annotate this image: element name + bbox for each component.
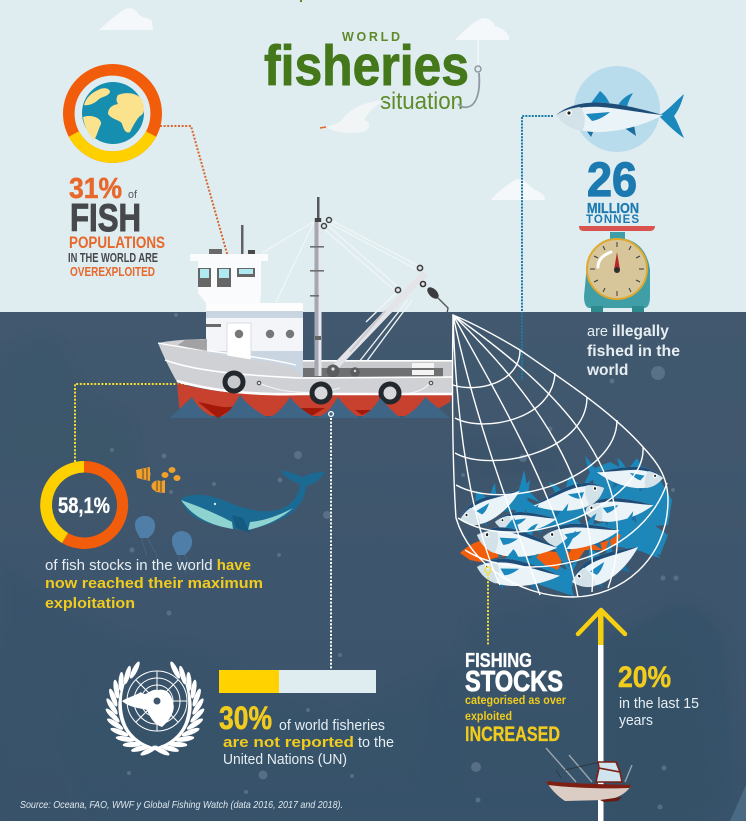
cloud top left: [99, 8, 153, 30]
icon: UN emblem: [104, 660, 206, 757]
dotted line: orange: [160, 126, 231, 262]
text: are illegally fished: world: [586, 362, 628, 379]
text: 58,1% description: now reached their maximum: [45, 575, 263, 592]
blue fin masses: [500, 462, 672, 595]
stat: 31% of fish populations: POPULATIONS: [69, 233, 165, 252]
hull: [177, 383, 452, 416]
icon: small orange fish: [136, 467, 180, 493]
text: 20%: in the last 15: [619, 696, 699, 712]
donut: 58,1%: [40, 461, 128, 549]
wreath: [104, 660, 206, 757]
net lines: [452, 315, 668, 597]
text: 20%: [618, 661, 699, 729]
title: situation: [380, 88, 463, 115]
text: 20%: years: [619, 713, 653, 729]
text: fishing stocks increased: INCREASED: [465, 723, 560, 746]
text: are illegally fished: [586, 323, 680, 379]
icon: globe donut: [69, 70, 156, 163]
title: fisheries: [264, 34, 469, 98]
arrow: upward increase: [578, 610, 625, 821]
text: 30% not reported: 30%: [219, 700, 272, 736]
bubbles: [110, 313, 678, 810]
text: 58,1% description: of fish stocks in the world have: [45, 557, 251, 574]
sea background: [0, 312, 746, 821]
dotted line: yellow to stocks: [485, 567, 491, 645]
text: 30% not reported: [219, 700, 394, 768]
illustration: net with fish: [452, 315, 672, 600]
waves: [170, 395, 450, 418]
tunas: [582, 485, 669, 528]
tyres: [225, 373, 243, 391]
boom: [336, 273, 425, 366]
text: 30% not reported: to the: [358, 734, 394, 751]
text: 20%: 20%: [618, 661, 671, 694]
text: 58,1% description: exploitation: [45, 595, 135, 612]
lighter seabed corner: [730, 785, 746, 821]
cabin: [206, 303, 303, 377]
icon: seagull: [320, 100, 385, 133]
title: WORLD: [342, 30, 400, 44]
sky background: [0, 0, 746, 313]
text: 58,1% description: [45, 557, 263, 612]
title: [264, 30, 469, 115]
text: fishing stocks increased: [465, 650, 566, 746]
dotted line: yellow to donut: [75, 384, 232, 462]
deck: [303, 360, 452, 378]
text: 30% not reported: are not reported: [223, 734, 354, 751]
donut: 58,1%: 58,1%: [58, 493, 110, 518]
icon: fishing hook: [458, 38, 481, 107]
stat: 31% of fish populations: FISH: [70, 197, 141, 240]
cloud middle right: [491, 179, 545, 200]
underwater silhouettes: [0, 337, 735, 821]
stat: 31% of fish populations: IN THE WORLD ARE: [68, 250, 158, 265]
cloud top right: [455, 18, 509, 40]
icon: jellyfish: [135, 516, 194, 574]
orange fish: [460, 532, 622, 570]
stat: 31% of fish populations: 31%: [69, 173, 122, 205]
icon: small boat: [546, 748, 632, 802]
dotted line: blue: [522, 116, 553, 380]
text: fishing stocks increased: exploited: [465, 711, 512, 723]
block and hook: [420, 282, 426, 286]
text: fishing stocks increased: STOCKS: [465, 666, 563, 698]
rigging lines: [262, 221, 418, 369]
tiny top mark: [300, 0, 302, 2]
icon: whale: [181, 470, 325, 533]
stat: 31% of fish populations: of: [128, 189, 138, 201]
stat: 26 million tonnes: TONNES: [586, 214, 639, 226]
source note: Source: Oceana, FAO, WWF y Global Fishing Watch (data 2016, 2017 and 2018).: [20, 799, 343, 811]
icon: tuna in circle: [556, 66, 684, 152]
wheelhouse: [198, 261, 261, 303]
text: are illegally fished: are illegally: [587, 323, 669, 340]
text: are illegally fished: fished in the: [587, 343, 680, 360]
stat: 31% of fish populations: OVEREXPLOITED: [70, 264, 155, 279]
progress bar: 30%: [219, 670, 376, 693]
stat: 31% of fish populations: [68, 173, 165, 279]
stat: 26 million tonnes: 26: [587, 154, 637, 207]
text: 30% not reported: of world fisheries: [279, 717, 385, 734]
stat: 26 million tonnes: MILLION: [587, 200, 639, 217]
dotted line: white from boat to bar: [329, 412, 333, 670]
illustration: fishing boat: [158, 197, 452, 418]
icon: weighing scale: [579, 226, 655, 312]
text: 30% not reported: United Nations (UN): [223, 751, 347, 768]
mast: [317, 197, 320, 221]
text: fishing stocks increased: categorised as over: [465, 695, 566, 707]
text: fishing stocks increased: FISHING: [465, 650, 532, 672]
